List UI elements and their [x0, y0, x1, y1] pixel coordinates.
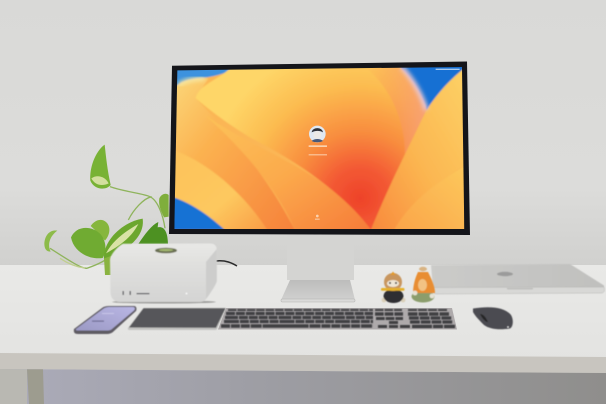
soft lilac edge of blue sky: [402, 67, 426, 110]
sweep band: [216, 123, 371, 229]
power cable: [216, 261, 237, 266]
laptop front edge: [433, 287, 604, 294]
mac status light: [186, 293, 187, 294]
mac body: [110, 244, 217, 302]
blue sky top right: [400, 67, 462, 110]
trackpad: [128, 308, 226, 330]
hat tip: [390, 272, 396, 275]
monitor screen wallpaper: [172, 64, 468, 232]
login name and prompt: [309, 145, 327, 220]
cream glow under blue left: [178, 78, 205, 85]
green base: [412, 290, 434, 302]
plant stems: [50, 187, 165, 268]
head: [384, 273, 402, 291]
right lower petal: [394, 165, 467, 230]
plant: [44, 145, 169, 275]
dark body: [384, 289, 404, 303]
mac right side: [206, 249, 217, 299]
face: [418, 279, 427, 291]
blue corner bottom left: [172, 197, 225, 230]
figurine: cat in orange hood: [412, 267, 435, 302]
laptop: [431, 264, 604, 294]
phone: [74, 306, 136, 334]
left upper band: [175, 78, 295, 230]
mac ports: [122, 291, 150, 295]
mac shadow: [112, 300, 216, 304]
monitor bezel: [169, 62, 470, 235]
paws: [413, 291, 417, 295]
blue sky top left: [177, 70, 230, 86]
peach right edge of center shape: [374, 68, 426, 153]
desk: [0, 265, 606, 404]
orange hood: [413, 272, 435, 293]
phone screen: [76, 307, 135, 330]
mouse: [473, 307, 513, 329]
stand foot: [281, 280, 355, 300]
lower left petal: [175, 154, 266, 229]
figurine: cat with dark body: [381, 272, 405, 303]
feet: [382, 298, 386, 302]
right petal: [371, 68, 467, 230]
stand neck: [287, 234, 354, 280]
wall background: [0, 0, 606, 268]
keyboard: [218, 308, 457, 330]
monitor stand: [281, 234, 355, 302]
plant leaves: [44, 145, 169, 275]
menu bar status icons: [436, 69, 460, 70]
laptop lid: [431, 264, 604, 288]
mac studio: [110, 244, 217, 304]
phone body: [74, 306, 136, 334]
keyboard keys: [221, 310, 456, 326]
keyboard body: [218, 308, 457, 330]
hat: [419, 267, 427, 271]
login avatar: [309, 126, 326, 142]
center large shape: [196, 65, 426, 230]
yellow band: [381, 288, 404, 291]
laptop logo: [497, 272, 513, 276]
mac vent: [155, 248, 177, 253]
monitor: [169, 62, 470, 235]
